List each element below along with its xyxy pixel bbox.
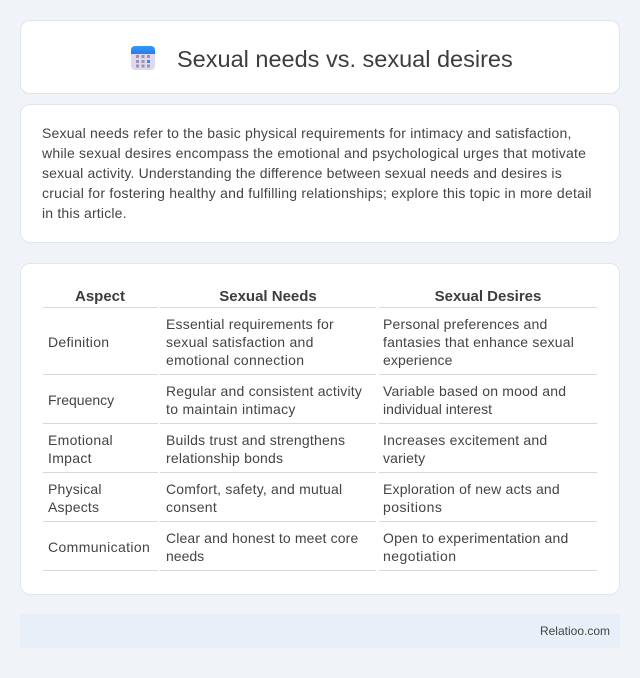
- row: emotional impact: relationship bonds: [166, 450, 283, 466]
- row: definition: [48, 316, 574, 368]
- row: communication: [48, 530, 568, 564]
- table header: Aspect: [75, 288, 125, 305]
- row: frequency: Variable based on mood and: [383, 383, 566, 399]
- title: Sexual needs vs. sexual desires: [177, 46, 513, 72]
- row: emotional impact: [48, 432, 547, 466]
- table header: Sexual Desires: [435, 288, 541, 305]
- row: definition: fantasies that enhance sexual: [383, 334, 574, 350]
- row: emotional impact: Builds trust and strengthens: [166, 432, 345, 448]
- row: communication: Communication: [48, 539, 150, 555]
- row: physical aspects: Physical: [48, 481, 102, 497]
- row: frequency: to maintain intimacy: [166, 401, 296, 417]
- footer credit: Relatioo.com: [540, 624, 610, 638]
- table header: [75, 288, 541, 305]
- row: communication: negotiation: [383, 548, 456, 564]
- icon: calendar: [131, 46, 155, 70]
- intro text: while sexual desires encompass the emotional and psychological urges that motivate: [42, 145, 586, 161]
- row: definition: experience: [383, 352, 452, 368]
- row: frequency: Frequency: [48, 392, 114, 408]
- row: physical aspects: positions: [383, 499, 442, 515]
- row: definition: emotional connection: [166, 352, 304, 368]
- row: communication: Clear and honest to meet core: [166, 530, 358, 546]
- intro panel: [20, 104, 620, 243]
- row: emotional impact: variety: [383, 450, 425, 466]
- intro text: Sexual needs refer to the basic physical requirements for intimacy and satisfaction,: [42, 125, 572, 141]
- row: frequency: individual interest: [383, 401, 492, 417]
- footer bar: [20, 614, 620, 648]
- row: physical aspects: Exploration of new acts and: [383, 481, 560, 497]
- row: emotional impact: Emotional: [48, 432, 113, 448]
- title card: [20, 20, 620, 94]
- intro text: sexual activity. Understanding the difference between sexual needs and desires is: [42, 165, 562, 181]
- intro text: [42, 125, 592, 221]
- row: definition: sexual satisfaction and: [166, 334, 314, 350]
- row: communication: Open to experimentation and: [383, 530, 568, 546]
- intro text: crucial for fostering healthy and fulfilling relationships; explore this topic in more detail: [42, 185, 592, 201]
- table header: Sexual Needs: [219, 288, 317, 305]
- row: definition: Personal preferences and: [383, 316, 547, 332]
- row: physical aspects: consent: [166, 499, 217, 515]
- row: definition: Essential requirements for: [166, 316, 334, 332]
- row: physical aspects: Comfort, safety, and mutual: [166, 481, 342, 497]
- row: emotional impact: Impact: [48, 450, 92, 466]
- row: frequency: Regular and consistent activity: [166, 383, 362, 399]
- comparison table: [43, 288, 597, 571]
- row: frequency: [48, 383, 566, 417]
- comparison table panel: [20, 263, 620, 595]
- row: physical aspects: Aspects: [48, 499, 99, 515]
- row: physical aspects: [48, 481, 560, 515]
- row: definition: Definition: [48, 334, 109, 350]
- row: communication: needs: [166, 548, 204, 564]
- row: emotional impact: Increases excitement and: [383, 432, 547, 448]
- intro text: in this article.: [42, 205, 127, 221]
